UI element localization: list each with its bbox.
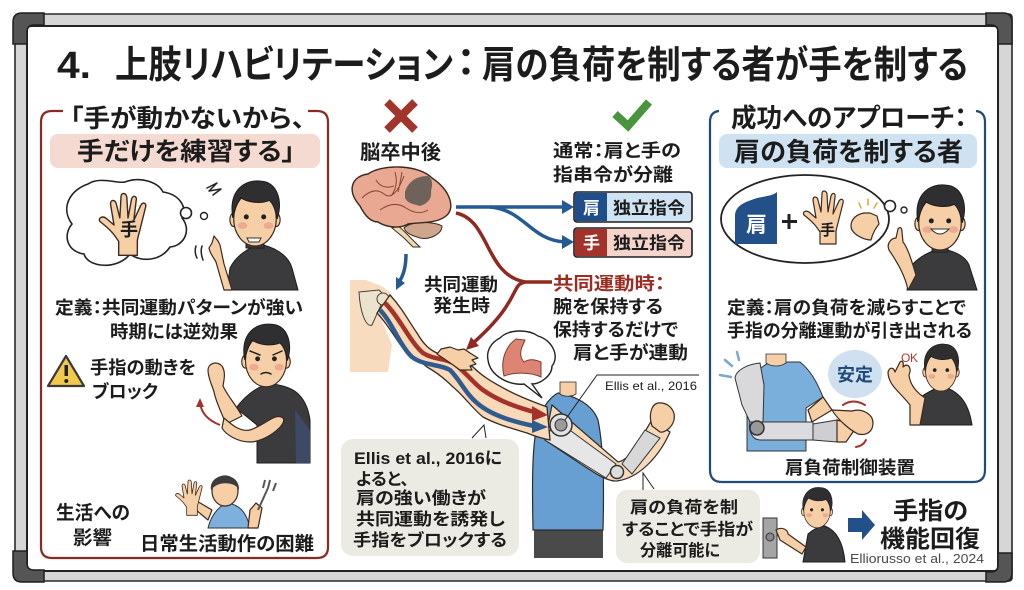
- callout: Ellis: [341, 425, 519, 556]
- normal label: 通常：肩と手の: [553, 141, 681, 161]
- patient with shoulder device: [720, 352, 873, 451]
- thought bubble: shoulder + hand: 手: [820, 222, 835, 239]
- callout: shoulder load: 分離可能に: [640, 540, 720, 560]
- definition text: [55, 297, 303, 342]
- heading pill: wrong approach: [50, 134, 320, 168]
- panel: wrong approach: [41, 104, 328, 558]
- definition text: 定義：共同運動パターンが強い: [55, 297, 303, 318]
- thought bubble: shoulder + hand: [721, 175, 907, 263]
- synergy text: 肩と手が連動: [573, 342, 688, 363]
- badge: stable: [828, 350, 882, 398]
- command box: shoulder: 肩: [583, 199, 600, 218]
- callout: shoulder load: することで手指が: [622, 519, 754, 539]
- callout: shoulder load: [616, 473, 760, 563]
- command box: hand: 独立指令: [613, 234, 685, 253]
- callout: Ellis: よると、: [356, 470, 409, 489]
- synergy label: 共同運動: [424, 275, 498, 295]
- shoulder and torso: [350, 280, 392, 372]
- title: ：: [456, 43, 476, 85]
- result text: 機能回復: [880, 526, 980, 553]
- heading: success: 成功へのアプローチ：: [731, 103, 967, 133]
- definition text: success: 手指の分離運動が引き出される: [727, 320, 972, 341]
- heading: wrong approach: 手だけを練習する」: [77, 138, 295, 166]
- title: 4.: [57, 45, 91, 87]
- command box: shoulder: [574, 192, 692, 222]
- brain: [352, 167, 451, 247]
- title: 上肢リハビリテーション: [115, 45, 453, 87]
- device label: 肩負荷制御装置: [785, 458, 915, 478]
- command box: shoulder: 独立指令: [613, 199, 685, 218]
- heading: success: 肩の負荷を制する者: [734, 137, 963, 167]
- therapist smiling: [888, 185, 977, 290]
- heading: wrong approach: 「手が動かないから、: [70, 104, 305, 133]
- icon: warning: [48, 356, 84, 386]
- therapist worried: [195, 181, 298, 290]
- synergy text: 腕を保持する: [553, 297, 663, 317]
- impact text: [56, 502, 130, 549]
- normal label: [553, 141, 681, 185]
- synergy text: 共同運動時：: [553, 274, 665, 294]
- definition text: success: [727, 297, 972, 341]
- heading pill: success: [719, 134, 977, 168]
- title: [57, 43, 968, 87]
- synergy label: 発生時: [433, 296, 490, 316]
- warning text: 手指の動きを: [90, 357, 196, 378]
- arrows: brain to normal commands: [396, 200, 574, 350]
- command box: hand: [574, 228, 692, 257]
- patient with fork: [176, 476, 276, 528]
- callout: Ellis: 手指をブロックする: [353, 530, 507, 550]
- badge: stable: 安定: [837, 365, 873, 385]
- impact text: 生活への: [56, 502, 130, 524]
- definition text: success: 定義：肩の負荷を減らすことで: [727, 297, 966, 318]
- callout: Ellis: Ellis et al., 2016に: [354, 449, 502, 468]
- normal label: 指串令が分離: [553, 164, 673, 185]
- therapist OK: [888, 344, 972, 425]
- thought bubble with hand: 手: [120, 220, 138, 240]
- arm with nerve tracts: [377, 295, 550, 440]
- callout: shoulder load: 肩の負荷を制: [630, 498, 738, 517]
- result text: [880, 498, 980, 553]
- panel: success approach: [710, 103, 985, 482]
- title: 肩の負荷を制する者が手を制する: [482, 45, 968, 87]
- therapist OK: OK: [901, 351, 918, 365]
- arrow: to recovery: [848, 510, 875, 540]
- thought bubble: muscle: [488, 331, 555, 398]
- thought bubble: shoulder + hand: 肩: [746, 214, 767, 237]
- panel: center mechanism: [341, 102, 760, 563]
- citation: Ellis: [565, 375, 699, 420]
- bottom: therapist with switch: [763, 487, 845, 562]
- synergy label: [424, 275, 498, 316]
- synergy text: 保持するだけで: [553, 320, 678, 340]
- result text: 手指の: [893, 498, 968, 525]
- daily life text: 日常生活動作の困難: [140, 533, 314, 555]
- synergy text: [553, 274, 688, 363]
- citation: Ellis: Ellis et al., 2016: [605, 379, 697, 393]
- icon: check: [615, 102, 649, 126]
- warning text: ブロック: [92, 381, 158, 402]
- impact text: 影響: [73, 527, 112, 549]
- callout: Ellis: 肩の強い働きが: [356, 488, 486, 508]
- command box: hand: 手: [583, 233, 600, 253]
- definition text: 時期には逆効果: [110, 322, 238, 342]
- thought bubble with hand: [67, 180, 208, 265]
- callout: Ellis: 共同運動を誘発し: [356, 510, 505, 529]
- icon: cross: [387, 102, 415, 130]
- therapist holding wrist: [196, 324, 310, 463]
- warning text: [90, 357, 196, 402]
- heading: wrong approach: [70, 104, 305, 166]
- heading: success: [731, 103, 967, 167]
- patient torso and exoskeleton arm: [533, 382, 674, 558]
- label: after stroke: 脳卒中後: [360, 141, 441, 164]
- citation: Elliorusso: Elliorusso et al., 2024: [850, 551, 984, 566]
